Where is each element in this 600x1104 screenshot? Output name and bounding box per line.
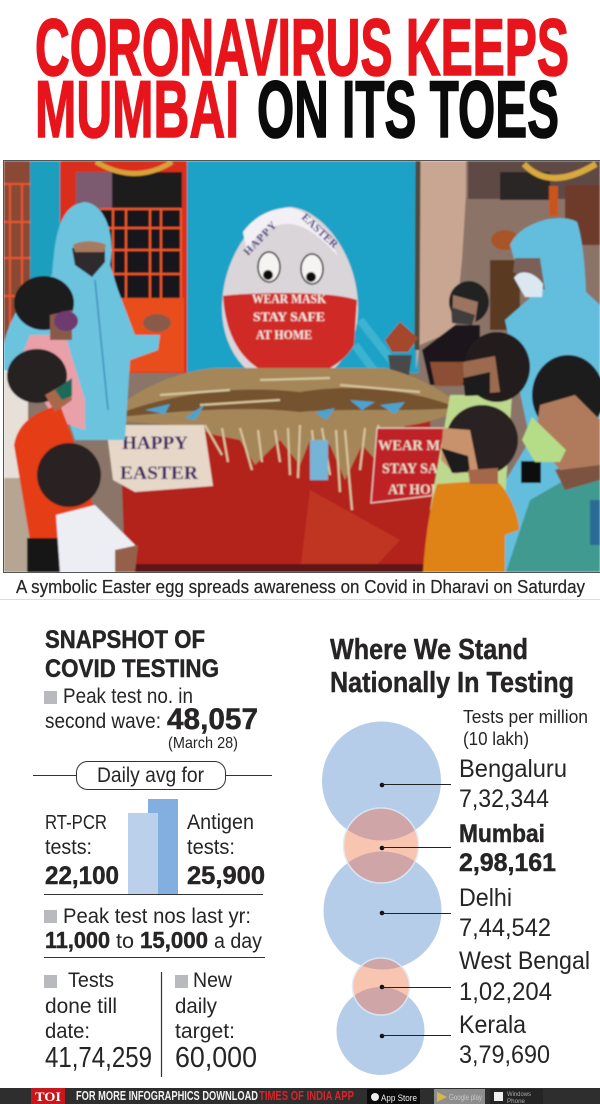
boy in orange — [7, 349, 100, 572]
egg: EASTER — [299, 211, 341, 252]
sign: happy easter: HAPPY — [122, 433, 188, 454]
photo frame — [3, 160, 600, 572]
label: Kerala — [459, 1011, 550, 1069]
peak test number in second wave — [44, 685, 258, 752]
peak tests last year: 11,000 — [45, 927, 110, 953]
pillar — [416, 161, 468, 370]
peak tests last year: 15,000 — [140, 927, 208, 953]
sign: wear mask: WEAR M — [378, 438, 440, 454]
label: Kerala: Kerala — [459, 1011, 526, 1039]
peak test number in second wave: 48,057 — [167, 703, 258, 736]
boy in teal shirt — [506, 355, 600, 572]
peak test number in second wave: Peak test no. in — [63, 685, 193, 708]
heading: where we stand — [330, 634, 574, 699]
label: Kerala: 3,79,690 — [459, 1041, 550, 1069]
RT-PCR tests: tests: — [45, 836, 92, 859]
label: Mumbai: 2,98,161 — [459, 849, 556, 877]
sign: wear mask: STAY SA — [382, 461, 438, 477]
new daily target: 60,000 — [175, 1042, 257, 1074]
label: Mumbai — [459, 820, 556, 877]
tests done till date: date: — [45, 1020, 90, 1043]
label: Bengaluru: 7,32,344 — [459, 785, 549, 813]
peak tests last year — [44, 905, 262, 953]
RT-PCR tests: 22,100 — [45, 862, 119, 890]
badge: App Store — [367, 1089, 420, 1104]
blue wall centre — [187, 161, 419, 373]
badge: Google Play: Google play — [449, 1093, 482, 1102]
egg eyes — [258, 252, 323, 284]
badge: App Store: App Store — [381, 1093, 417, 1104]
new daily target — [175, 969, 257, 1074]
peak test number in second wave: second wave: — [45, 710, 161, 733]
label: West Bengal: 1,02,204 — [459, 978, 552, 1006]
hay — [104, 368, 462, 510]
chart subtitle: (10 lakh) — [463, 729, 529, 749]
tests done till date: done till — [45, 995, 117, 1018]
heading: snapshot: COVID TESTING — [45, 655, 219, 683]
bubble chart: tests per million — [322, 722, 451, 1075]
RT-PCR tests — [45, 812, 119, 890]
egg — [222, 207, 358, 386]
footer message: FOR MORE INFOGRAPHICS DOWNLOAD — [76, 1088, 258, 1103]
heading: snapshot — [45, 626, 219, 683]
label: Delhi: 7,44,542 — [459, 914, 551, 942]
TOI logo — [31, 1088, 65, 1104]
tests done till date — [44, 969, 152, 1074]
label: West Bengal: West Bengal — [459, 947, 590, 975]
boy in green shirt with black mask — [430, 332, 530, 510]
boy in orange shirt, right — [423, 405, 519, 572]
bar chart: daily averages — [128, 799, 178, 894]
panel: where we stand nationally — [322, 634, 590, 1075]
peak tests last year: Peak test nos last yr: — [63, 905, 251, 928]
badge: Windows Phone: Windows — [507, 1091, 532, 1098]
footer message: TIMES OF INDIA APP — [259, 1088, 354, 1103]
boy in black — [422, 281, 489, 386]
red doorway — [60, 161, 188, 373]
label: Bengaluru: Bengaluru — [459, 755, 567, 783]
sign: happy easter — [106, 425, 213, 492]
TOI logo: TOI — [35, 1089, 61, 1104]
badge: Google Play — [434, 1089, 485, 1104]
sign: wear mask — [371, 428, 447, 503]
RT-PCR tests: RT-PCR — [45, 812, 107, 834]
badge: Windows Phone — [490, 1089, 543, 1104]
antigen tests: Antigen — [187, 811, 254, 834]
daily average pill: Daily avg for — [97, 764, 204, 787]
chart subtitle — [463, 707, 588, 749]
egg: HAPPY — [242, 220, 279, 258]
daily average pill — [33, 762, 272, 790]
egg: STAY SAFE — [253, 310, 325, 324]
photo: Easter egg in Dharavi — [4, 161, 600, 572]
surgical mask on hay — [310, 440, 328, 480]
antigen tests: 25,900 — [187, 862, 265, 890]
worker right in PPE — [500, 218, 600, 572]
label: Mumbai: Mumbai — [459, 820, 545, 848]
chart subtitle: Tests per million — [463, 707, 588, 727]
boy with purple mask — [14, 276, 85, 430]
footer bar — [0, 1088, 600, 1104]
new daily target: New — [193, 969, 233, 992]
potted plant — [385, 322, 418, 376]
boy in white shirt — [37, 443, 138, 572]
left grille wall — [4, 161, 32, 572]
blue wall left — [30, 161, 63, 286]
peak tests last year: to — [116, 930, 134, 953]
new daily target: daily — [175, 995, 217, 1018]
title: MUMBAI — [35, 65, 239, 155]
egg: AT HOME — [256, 328, 312, 342]
peak tests last year: a day — [214, 930, 262, 953]
red table cloth — [120, 420, 440, 572]
new daily target: target: — [175, 1020, 235, 1043]
label: Delhi: Delhi — [459, 884, 512, 912]
antigen tests — [187, 811, 265, 890]
label: West Bengal — [459, 947, 590, 1006]
title — [35, 3, 569, 155]
sign: wear mask: AT HOI — [388, 482, 436, 498]
egg: WEAR MASK — [252, 292, 326, 306]
tests done till date: Tests — [68, 969, 114, 992]
sign: happy easter: EASTER — [120, 463, 198, 484]
worker left in PPE — [4, 202, 171, 440]
peak test number in second wave: (March 28) — [168, 735, 238, 752]
tests done till date: 41,74,259 — [45, 1042, 152, 1074]
antigen tests: tests: — [187, 836, 235, 859]
right room — [466, 161, 600, 330]
heading: where we stand: Where We Stand — [330, 634, 528, 666]
label: Bengaluru — [459, 755, 567, 813]
label: Delhi — [459, 884, 551, 942]
panel: snapshot of covid testing — [33, 626, 272, 1077]
heading: snapshot: SNAPSHOT OF — [45, 626, 205, 654]
